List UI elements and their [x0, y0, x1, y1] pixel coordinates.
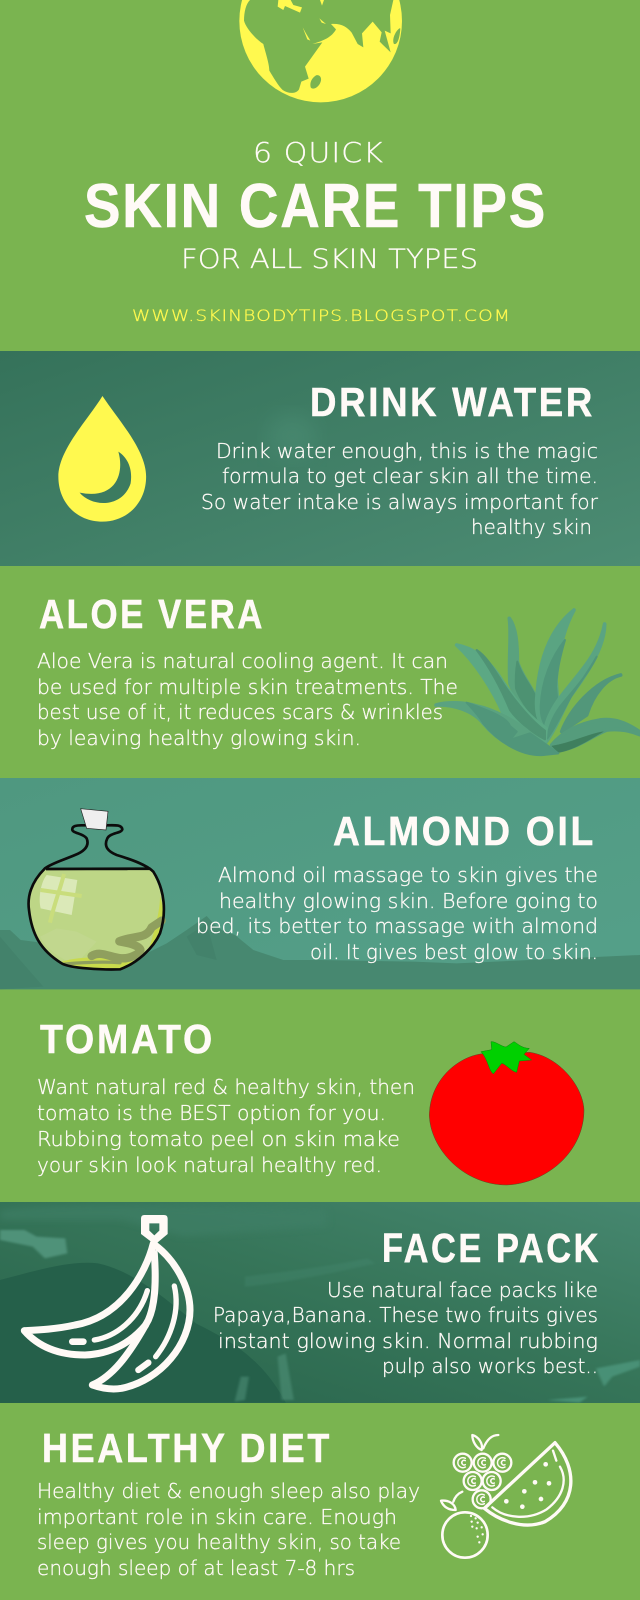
body text: drink water: So water intake is always important for [201, 490, 599, 514]
website url: WWW.SKINBODYTIPS.BLOGSPOT.COM [132, 306, 511, 325]
heading: almond oil: ALMOND OIL [333, 808, 596, 854]
heading: face pack: FACE PACK [382, 1225, 601, 1271]
body text: healthy diet [37, 1479, 420, 1580]
heading: healthy diet: HEALTHY DIET [42, 1425, 332, 1471]
body text: face pack: pulp also works best.. [382, 1354, 598, 1378]
body text: drink water: Drink water enough, this is the magic [216, 439, 598, 463]
title: SKIN CARE TIPS [84, 172, 547, 241]
icon: globe [239, 0, 402, 102]
icon: banana bunch [24, 1215, 190, 1389]
body text: almond oil: oil. It gives best glow to skin. [310, 940, 598, 964]
panel: healthy diet [37, 1425, 571, 1580]
panel: drink water [0, 351, 640, 566]
heading: tomato: TOMATO [40, 1016, 215, 1062]
icon: tomato [429, 1042, 584, 1185]
subtitle: for all skin types: FOR ALL SKIN TYPES [181, 244, 478, 275]
header panel [84, 0, 547, 325]
body text: healthy diet: important role in skin care. Enough [37, 1505, 397, 1529]
body text: healthy diet: Healthy diet & enough sleep also play [37, 1479, 420, 1503]
panel background with landscape [0, 1202, 640, 1403]
body text: drink water: formula to get clear skin all the time. [222, 464, 598, 488]
body text: almond oil: healthy glowing skin. Before going to [219, 889, 598, 913]
body text: face pack: Papaya,Banana. These two fruits gives [213, 1303, 598, 1327]
icon: oil bottle [29, 809, 164, 969]
body text: aloe vera: be used for multiple skin treatments. The [37, 675, 458, 699]
body text: healthy diet: sleep gives you healthy skin, so take [37, 1530, 401, 1554]
heading: drink water: DRINK WATER [310, 379, 595, 425]
body text: tomato: Want natural red & healthy skin, then [37, 1075, 415, 1099]
body text: aloe vera [37, 649, 458, 750]
body text: drink water [201, 439, 599, 539]
body text: aloe vera: by leaving healthy glowing skin. [37, 726, 361, 750]
icon: fruits [441, 1435, 571, 1558]
body text: aloe vera: Aloe Vera is natural cooling agent. It can [37, 649, 448, 673]
body text: tomato: your skin look natural healthy red. [37, 1153, 382, 1177]
body text: face pack: Use natural face packs like [327, 1278, 598, 1302]
body text: face pack [213, 1278, 598, 1378]
icon: water drop [58, 396, 146, 522]
body text: face pack: instant glowing skin. Normal rubbing [218, 1329, 598, 1353]
body text: almond oil: bed, its better to massage with almond [196, 914, 598, 938]
panel: aloe vera [37, 591, 640, 755]
heading: aloe vera: ALOE VERA [39, 591, 265, 637]
subtitle: 6 quick: 6 QUICK [253, 136, 384, 169]
panel: face pack [0, 1202, 640, 1403]
panel background [0, 351, 640, 566]
body text: almond oil: Almond oil massage to skin gives the [218, 863, 598, 887]
panel: tomato [37, 1016, 584, 1185]
body text: tomato [37, 1075, 415, 1177]
icon: aloe plant [436, 610, 640, 755]
body text: aloe vera: best use of it, it reduces scars & wrinkles [37, 700, 443, 724]
panel background with mountains [0, 778, 640, 989]
body text: healthy diet: enough sleep of at least 7-8 hrs [37, 1556, 355, 1580]
body text: tomato: tomato is the BEST option for you. [37, 1101, 386, 1125]
panel: almond oil [0, 778, 640, 989]
body text: drink water: healthy skin [471, 515, 592, 539]
body text: almond oil [196, 863, 598, 964]
body text: tomato: Rubbing tomato peel on skin make [37, 1127, 400, 1151]
